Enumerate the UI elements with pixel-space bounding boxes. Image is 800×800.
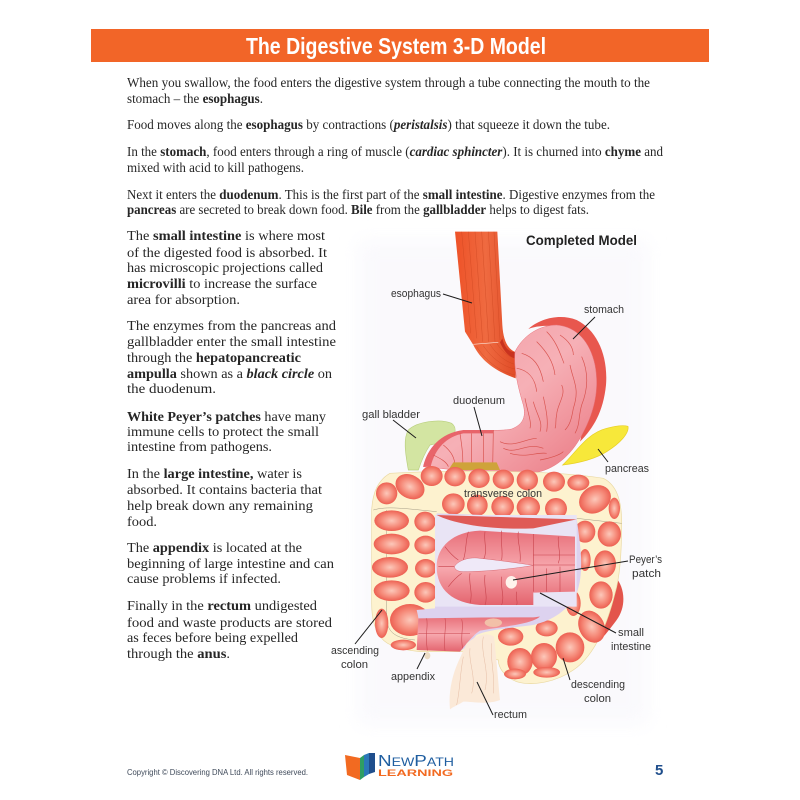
text block: introduction paragraphs: When you swallow, the food enters the digestive system through a tube connecting the mouth to the bbox=[127, 75, 650, 90]
footer logo: New Path Learning: LEARNING bbox=[378, 768, 453, 778]
diagram labels: colon bbox=[584, 693, 611, 705]
illustration: lower digestive organs bbox=[372, 466, 623, 709]
text block: small intestine and large intestine column: has microscopic projections called bbox=[127, 261, 323, 276]
lavender panel bbox=[418, 513, 581, 652]
diagram labels: ascending bbox=[331, 645, 379, 657]
footer logo: New Path Learning: NEWPATH bbox=[378, 753, 454, 770]
diagram labels: gall bladder bbox=[362, 409, 420, 421]
text block: small intestine and large intestine column: ampulla shown as a black circle on bbox=[127, 367, 332, 382]
stomach wrinkles bbox=[433, 332, 587, 468]
text block: small intestine and large intestine column: White Peyer’s patches have many bbox=[127, 410, 326, 425]
descending colon back tube bbox=[603, 577, 623, 637]
text block: small intestine and large intestine column: gallbladder enter the small intestine bbox=[127, 335, 336, 350]
small intestine loop bbox=[437, 531, 575, 605]
diagram labels: patch bbox=[632, 568, 661, 580]
stomach back wall bbox=[528, 317, 606, 442]
title banner: The Digestive System 3-D Model bbox=[246, 33, 546, 59]
red mesentery strip bbox=[437, 515, 577, 529]
text block: small intestine and large intestine column: help break down any remaining bbox=[127, 499, 313, 514]
diagram labels: duodenum bbox=[453, 395, 505, 407]
text block: small intestine and large intestine column: The appendix is located at the bbox=[127, 541, 302, 556]
colon fold line bbox=[373, 508, 622, 640]
diagram labels: small bbox=[618, 627, 644, 639]
diagram labels: transverse colon bbox=[464, 488, 542, 500]
text block: small intestine and large intestine column: microvilli to increase the surface bbox=[127, 277, 317, 292]
text block: introduction paragraphs: Next it enters the duodenum. This is the first part of the small intestine. Digestive enzymes from the bbox=[127, 187, 655, 202]
duodenum rim bbox=[423, 430, 493, 467]
illustration: upper digestive organs bbox=[405, 232, 628, 473]
text block: introduction paragraphs: Food moves along the esophagus by contractions (peristalsis) that squeeze it down the tube. bbox=[127, 117, 610, 132]
diagram labels: rectum bbox=[494, 709, 527, 721]
appendix bbox=[424, 652, 430, 659]
chart heading: completed model: Completed Model bbox=[526, 233, 637, 248]
text block: small intestine and large intestine column: food and waste products are stored bbox=[127, 616, 332, 631]
text block: introduction paragraphs: pancreas are secreted to break down food. Bile from the gallbladder helps to digest fats. bbox=[127, 202, 589, 217]
footer logo: New Path Learning bbox=[345, 753, 454, 780]
text block: small intestine and large intestine column: the duodenum. bbox=[127, 382, 216, 397]
text block: small intestine and large intestine column: as feces before being expelled bbox=[127, 631, 298, 646]
text block: small intestine and large intestine column: Finally in the rectum undigested bbox=[127, 599, 317, 614]
colon body bbox=[372, 471, 622, 684]
lower small intestine strip bbox=[417, 617, 540, 652]
text block: small intestine and large intestine column: cause problems if infected. bbox=[127, 572, 281, 587]
text block: small intestine and large intestine column: beginning of large intestine and can bbox=[127, 557, 334, 572]
text block: small intestine and large intestine column: through the anus. bbox=[127, 647, 230, 662]
colon sacculations bbox=[372, 466, 621, 679]
text block: small intestine and large intestine column: In the large intestine, water is bbox=[127, 467, 302, 482]
lavender band over strip bbox=[417, 608, 553, 617]
text block: small intestine and large intestine column: food. bbox=[127, 515, 157, 530]
diagram labels: pancreas bbox=[605, 463, 649, 475]
rectum bbox=[450, 634, 500, 709]
text block: small intestine and large intestine column: through the hepatopancreatic bbox=[127, 351, 301, 366]
text block: small intestine and large intestine column: immune cells to protect the small bbox=[127, 425, 319, 440]
diagram labels: descending bbox=[571, 679, 625, 691]
diagram labels: colon bbox=[341, 659, 368, 671]
text block: introduction paragraphs: stomach – the esophagus. bbox=[127, 91, 263, 106]
gall bladder bbox=[405, 421, 455, 470]
stomach and duodenum bbox=[423, 325, 597, 473]
text block: small intestine and large intestine column: The small intestine is where most bbox=[127, 229, 325, 244]
esophagus bbox=[455, 232, 517, 378]
text block: small intestine and large intestine column bbox=[127, 229, 336, 662]
diagram labels: intestine bbox=[611, 641, 651, 653]
Peyer's patch bbox=[506, 576, 517, 589]
text block: introduction paragraphs bbox=[127, 75, 663, 217]
diagram labels: esophagus bbox=[391, 288, 441, 300]
text block: small intestine and large intestine column: absorbed. It contains bacteria that bbox=[127, 483, 322, 498]
text block: introduction paragraphs: mixed with acid to kill pathogens. bbox=[127, 160, 304, 175]
diagram labels bbox=[331, 288, 662, 721]
illustration background glow bbox=[358, 240, 648, 725]
text block: small intestine and large intestine column: area for absorption. bbox=[127, 293, 240, 308]
pancreas bbox=[563, 426, 628, 465]
text block: introduction paragraphs: In the stomach, food enters through a ring of muscle (cardiac sphincter). It is churned into chyme and bbox=[127, 144, 663, 159]
leader lines bbox=[355, 294, 628, 715]
text block: small intestine and large intestine column: The enzymes from the pancreas and bbox=[127, 319, 336, 334]
fat pad below duodenum bbox=[448, 462, 500, 470]
page number: 5 bbox=[655, 762, 663, 779]
text block: small intestine and large intestine column: intestine from pathogens. bbox=[127, 440, 272, 455]
diagram labels: stomach bbox=[584, 304, 624, 316]
diagram labels: appendix bbox=[391, 671, 435, 683]
footer copyright: Copyright © Discovering DNA Ltd. All rights reserved. bbox=[127, 767, 308, 777]
text block: small intestine and large intestine column: of the digested food is absorbed. It bbox=[127, 246, 327, 261]
diagram labels: Peyer’s bbox=[629, 554, 662, 566]
title banner bbox=[91, 29, 709, 62]
